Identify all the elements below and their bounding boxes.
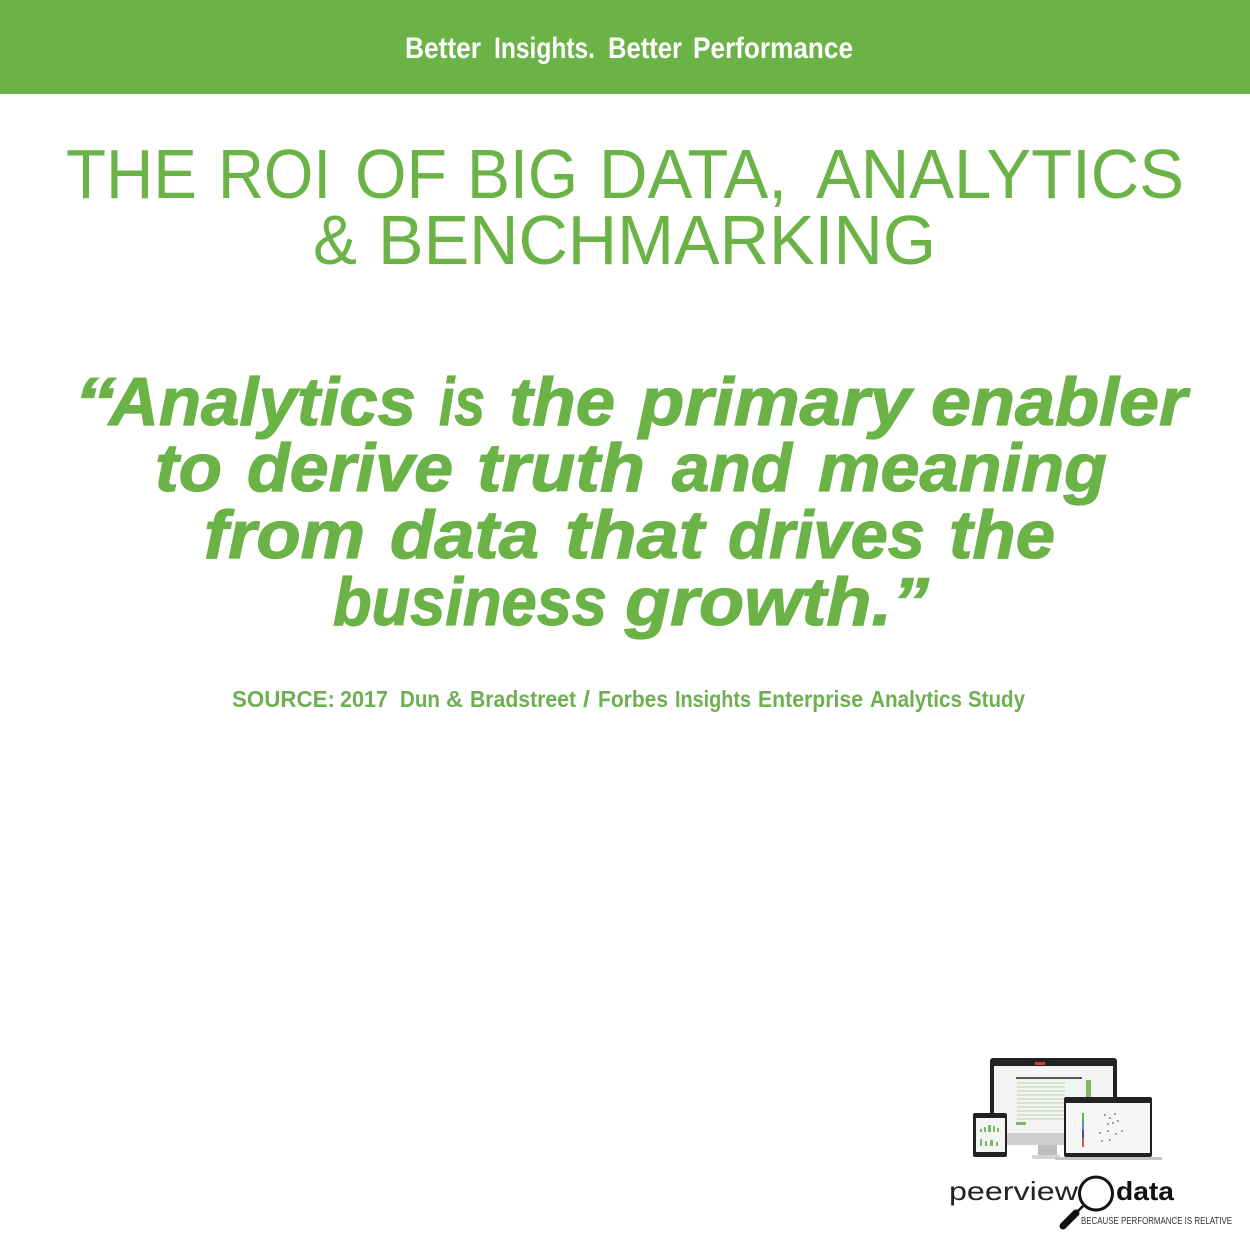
quote: the xyxy=(509,364,615,440)
source line: Bradstreet xyxy=(470,686,576,712)
title: ANALYTICS xyxy=(816,135,1184,213)
title: THE xyxy=(66,135,197,213)
banner text: Better xyxy=(405,32,481,65)
title: BIG xyxy=(467,135,578,213)
banner text: Insights. xyxy=(494,32,595,65)
source line: / xyxy=(583,686,591,712)
source line: Analytics xyxy=(870,686,962,712)
source line: Enterprise xyxy=(758,686,863,712)
icon: magnifying glass xyxy=(1063,1177,1112,1226)
icon: tablet xyxy=(973,1113,1007,1157)
quote: growth.” xyxy=(624,564,929,640)
quote: enabler xyxy=(931,364,1191,440)
quote: business xyxy=(333,564,607,640)
logo: peerview data xyxy=(949,1058,1232,1227)
icon: laptop xyxy=(1055,1097,1162,1160)
banner text: Performance xyxy=(693,32,853,65)
header banner xyxy=(0,0,1250,94)
quote: derive xyxy=(247,430,453,506)
source line: 2017 xyxy=(340,686,388,712)
quote: the xyxy=(949,497,1055,573)
quote: Analytics xyxy=(107,364,416,440)
quote: drives xyxy=(728,497,925,573)
icon: desktop monitor xyxy=(990,1058,1117,1159)
source line: Forbes xyxy=(598,686,668,712)
quote: is xyxy=(439,364,485,440)
quote: and xyxy=(672,430,793,506)
quote: primary xyxy=(637,364,914,440)
logo wordmark: peerview: peerview xyxy=(949,1176,1078,1206)
source line: SOURCE: xyxy=(232,686,335,712)
banner text: Better xyxy=(608,32,682,65)
quote: “ xyxy=(74,364,116,440)
title: ROI xyxy=(218,135,331,213)
title: DATA, xyxy=(599,135,787,213)
quote: from xyxy=(204,497,365,573)
title xyxy=(66,135,1184,279)
title: & xyxy=(313,201,357,279)
source line: Study xyxy=(968,686,1025,712)
quote: data xyxy=(390,497,539,573)
quote: meaning xyxy=(818,430,1107,506)
quote xyxy=(74,364,1191,640)
source line: & xyxy=(446,686,463,712)
quote: to xyxy=(155,430,222,506)
logo wordmark: data: data xyxy=(1116,1176,1175,1206)
title: BENCHMARKING xyxy=(378,201,936,279)
quote: that xyxy=(565,497,707,573)
title: OF xyxy=(355,135,447,213)
quote: truth xyxy=(477,430,645,506)
source line: Insights xyxy=(675,686,751,712)
source line: Dun xyxy=(400,686,440,712)
